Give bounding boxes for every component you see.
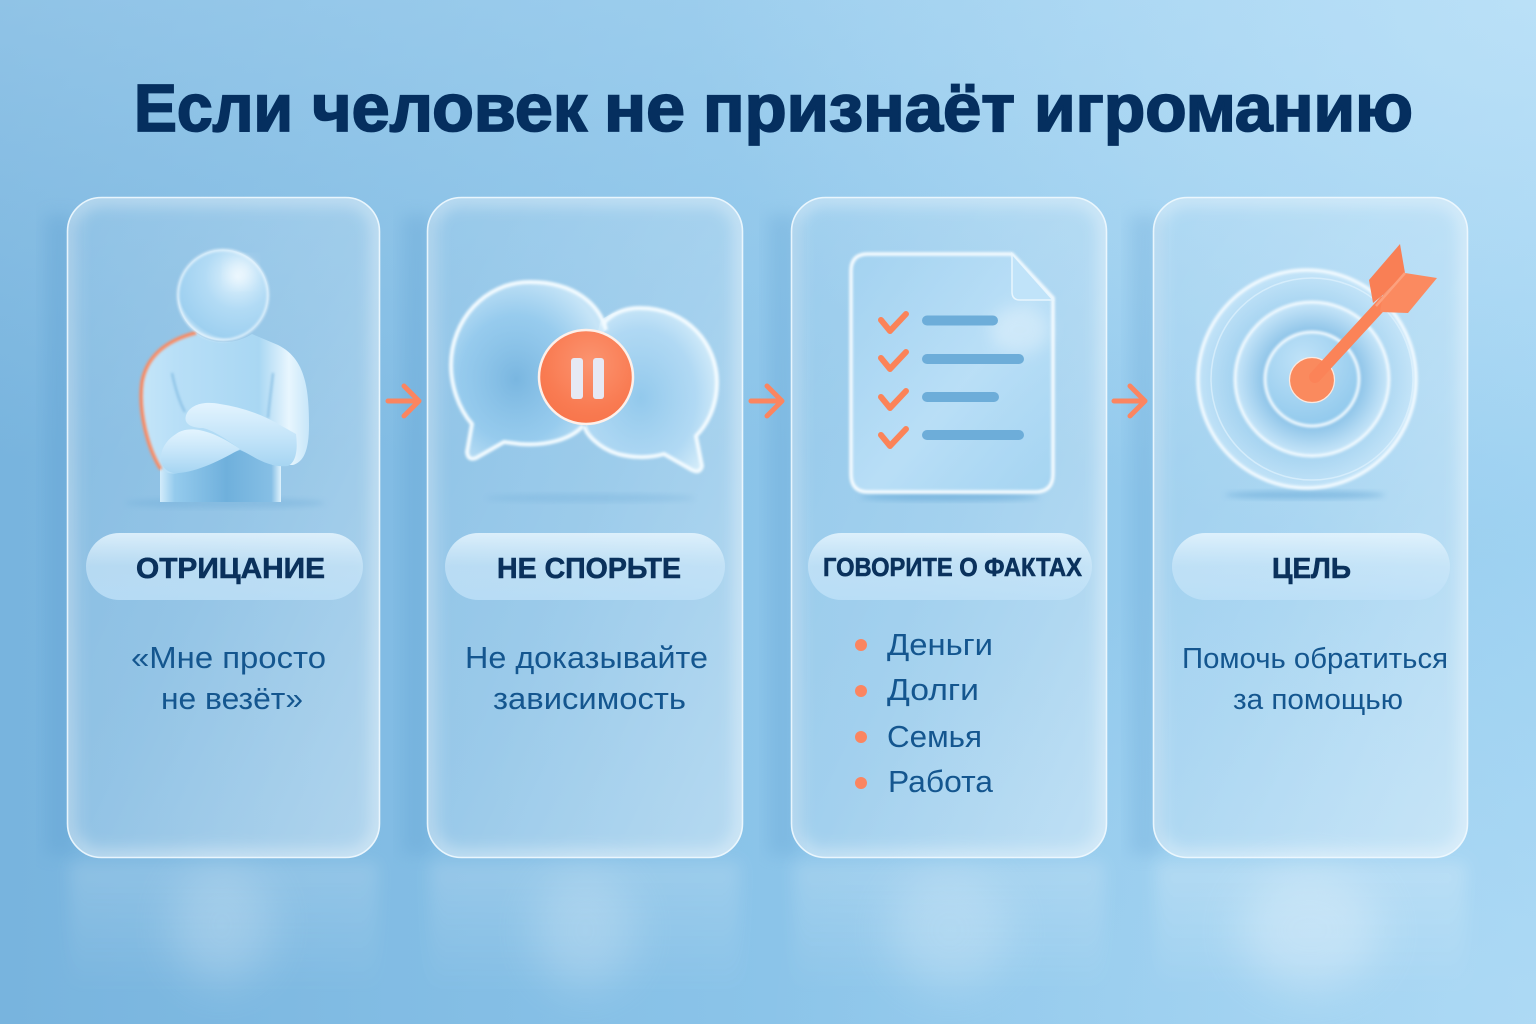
bullet list: Работа <box>888 764 994 799</box>
arrow 3 <box>1114 386 1145 416</box>
panel: do not argue <box>427 197 743 858</box>
bullet list: Деньги <box>887 627 993 662</box>
left bubble <box>451 282 606 459</box>
arrow 1 <box>388 386 419 416</box>
body text <box>465 640 708 716</box>
floor reflections <box>70 862 1466 992</box>
panel: denial <box>67 197 380 858</box>
label pill: ЦЕЛЬ <box>1272 553 1351 585</box>
body text <box>131 640 326 716</box>
label pill <box>1172 533 1450 600</box>
card 3 glass <box>791 197 1107 858</box>
checks and lines <box>881 314 1024 446</box>
dart <box>1315 244 1437 377</box>
title: признаёт <box>703 71 1015 146</box>
icon: checklist document <box>851 254 1053 501</box>
right bubble <box>585 308 717 471</box>
bullet list: Долги <box>887 672 979 707</box>
icon: person with crossed arms <box>125 250 325 508</box>
bullet list: Семья <box>887 719 982 754</box>
bullet list <box>855 627 994 799</box>
body text: Не доказывайте <box>465 640 708 675</box>
title: Если <box>134 71 293 146</box>
body text <box>1182 643 1448 716</box>
panel: goal <box>1153 197 1468 858</box>
title: человек <box>312 71 587 146</box>
panel: talk about facts <box>791 197 1107 858</box>
label pill <box>445 533 725 600</box>
label pill <box>86 533 363 600</box>
body text: не везёт» <box>161 681 303 716</box>
title: не <box>604 71 685 146</box>
body text: «Мне просто <box>131 640 326 675</box>
icon: speech bubbles with pause <box>451 282 717 502</box>
card 2 glass <box>427 197 743 858</box>
body text: за помощью <box>1233 684 1403 716</box>
label pill: НЕ СПОРЬТЕ <box>497 553 681 585</box>
title <box>134 71 1413 146</box>
label pill <box>808 533 1092 600</box>
body text: Помочь обратиться <box>1182 643 1448 675</box>
title: игроманию <box>1034 71 1413 146</box>
arrow 2 <box>751 386 782 416</box>
card 4 glass <box>1153 197 1468 858</box>
pause button <box>539 330 633 424</box>
card 1 glass <box>67 197 380 858</box>
body text: зависимость <box>493 681 686 716</box>
icon: target with arrow <box>1198 244 1437 499</box>
label pill: ГОВОРИТЕ О ФАКТАХ <box>823 552 1083 582</box>
label pill: ОТРИЦАНИЕ <box>136 553 325 585</box>
